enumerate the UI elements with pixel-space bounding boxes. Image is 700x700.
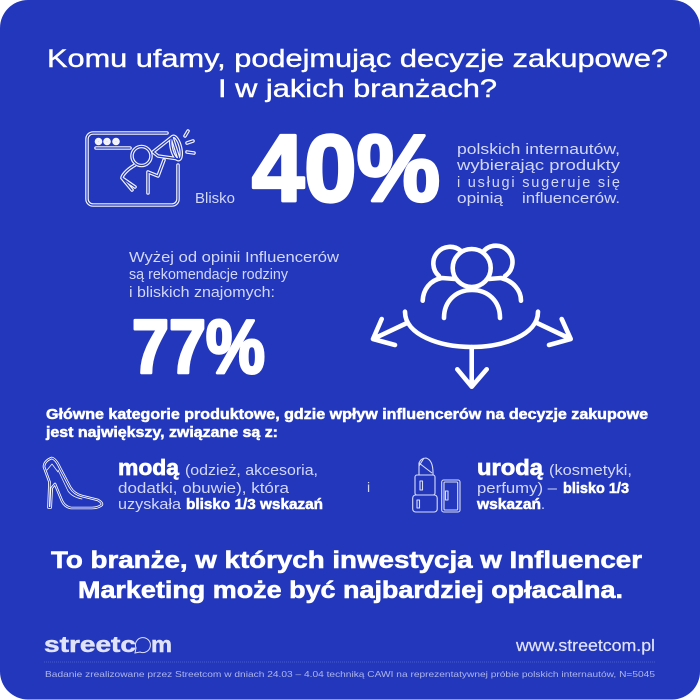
text block: family recommendations [129, 250, 340, 301]
connector: i: i [367, 479, 370, 495]
text block: fashion: dodatki, obuwie), która [118, 481, 290, 497]
text block: polish internet users: wybierając produkty [456, 158, 621, 174]
conclusion statement [51, 547, 642, 604]
heading: main categories [45, 407, 648, 441]
text block: family recommendations: Wyżej od opinii Influencerów [129, 250, 340, 266]
text block: beauty: perfumy) – [477, 481, 558, 497]
title: Komu ufamy, podejmując decyzje zakupowe? [47, 45, 668, 73]
website address: www.streetcom.pl [515, 636, 655, 655]
logo: streetcom: streetc [44, 632, 136, 657]
icon: lipstick and cosmetics [413, 458, 460, 512]
text block: fashion: blisko 1/3 wskazań [186, 497, 323, 513]
text block: beauty: wskazań [476, 497, 541, 513]
text block: family recommendations: i bliskich znajomych: [129, 285, 275, 301]
title: I w jakich branżach? [218, 75, 497, 103]
text block: polish internet users: i usługi sugeruje się [457, 175, 620, 191]
label: Blisko: Blisko [195, 191, 235, 207]
big number 77%: 77% [132, 305, 265, 390]
big number 40%: 40% [252, 116, 440, 222]
icon: group of people with arrows [373, 246, 571, 387]
title [47, 45, 668, 103]
icon: high heel shoe [44, 458, 102, 508]
footnote: Badanie zrealizowane przez Streetcom w dniach 24.03 – 4.04 techniką CAWI na reprezentatywnej próbie polskich internautów, N=5045 [45, 669, 655, 679]
text block: beauty: . [541, 497, 545, 513]
heading: main categories: jest największy, związane są z: [45, 425, 278, 441]
text block: fashion [118, 455, 323, 513]
text block: beauty: blisko 1/3 [563, 481, 629, 497]
text block: polish internet users: opinią [457, 191, 504, 207]
heading: main categories: Główne kategorie produktowe, gdzie wpływ influencerów na decyzje zakupowe [46, 407, 648, 423]
text block: beauty [476, 455, 632, 513]
logo: streetcom: m [151, 632, 172, 657]
text block: fashion: modą [118, 455, 180, 480]
text block: polish internet users: polskich internautów, [457, 142, 620, 158]
text block: beauty: urodą [477, 455, 544, 480]
text block: polish internet users: influencerów. [522, 191, 620, 207]
text block: fashion: uzyskała [118, 497, 182, 513]
icon: browser window with megaphone person [87, 131, 194, 205]
text block: polish internet users [456, 142, 621, 207]
conclusion statement: Marketing może być najbardziej opłacalna. [78, 577, 623, 604]
logo: streetcom [44, 632, 172, 657]
text block: family recommendations: są rekomendacje rodziny [129, 267, 289, 283]
text block: fashion: (odzież, akcesoria, [185, 463, 318, 479]
conclusion statement: To branże, w których inwestycja w Influencer [51, 547, 642, 574]
text block: beauty: (kosmetyki, [549, 463, 632, 479]
